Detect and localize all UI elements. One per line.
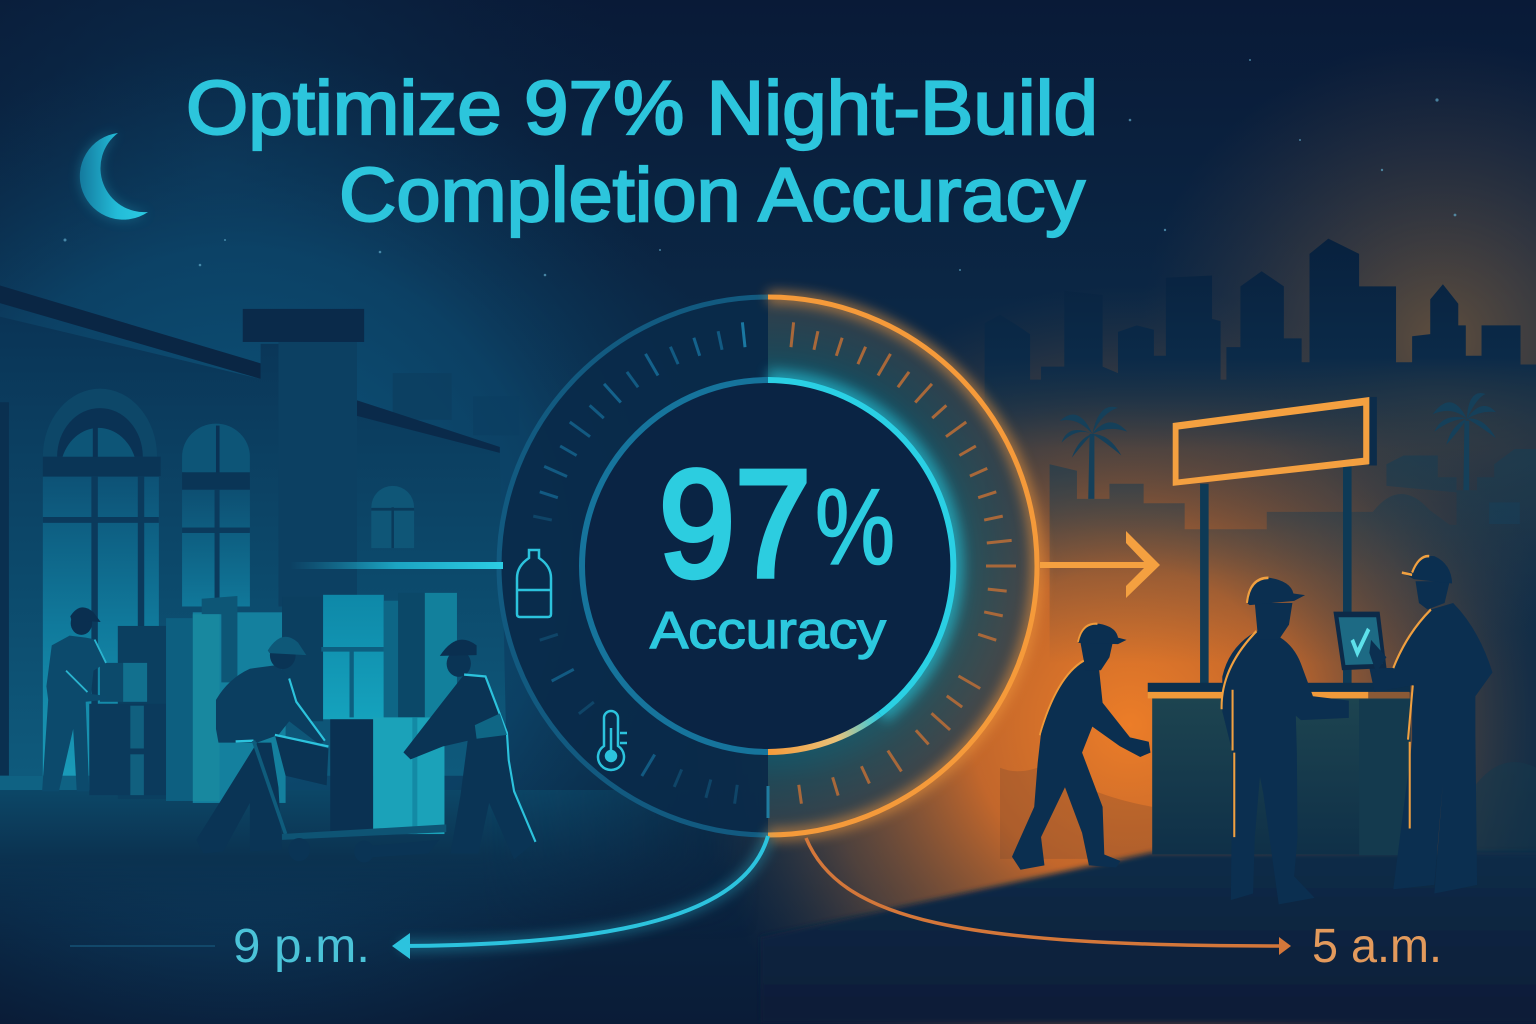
icon: bottle: [517, 550, 551, 617]
person far left: [42, 607, 107, 791]
label: 9 p.m.: 9 p.m.: [233, 920, 370, 973]
illustration: lower skyline and palms: [1000, 393, 1536, 859]
icon: tablet with check mark: [1333, 612, 1386, 672]
worker middle: [1222, 578, 1349, 904]
walking worker: [1012, 624, 1150, 870]
illustration: sign board: [1173, 397, 1377, 688]
title: Completion Accuracy: [339, 153, 1085, 238]
illustration: stacked crates: [89, 593, 457, 834]
icon: thermometer: [598, 711, 627, 770]
big arched window: [43, 389, 161, 776]
illustration: right workers: [1012, 556, 1492, 904]
person with box: [403, 640, 536, 859]
metric: 97%: %: [815, 466, 895, 587]
illustration: floor left: [0, 790, 662, 901]
arrow: line from left scene into gauge: [290, 562, 503, 569]
title: [186, 66, 1098, 238]
worker right: [1369, 556, 1492, 894]
second arched window: [182, 424, 250, 606]
illustration: counter: [1148, 683, 1410, 855]
person pushing cart: [196, 637, 328, 854]
gauge: inner circle: [582, 380, 954, 752]
icon: crescent moon: [80, 133, 148, 220]
arrow: gauge to right scene: [1040, 531, 1160, 598]
arrow: curve to 5 a.m.: [806, 838, 1291, 955]
illustration: right ground: [761, 852, 1536, 1024]
illustration: city skyline: [985, 239, 1536, 577]
title: Optimize 97% Night-Build: [186, 66, 1098, 151]
small window: [371, 486, 414, 548]
gauge: outer ring: [499, 297, 1037, 835]
hand cart: [253, 741, 446, 862]
illustration: left workers: [42, 607, 536, 862]
illustration: warehouse building: [0, 286, 519, 799]
arrow: curve to 9 p.m.: [70, 836, 768, 959]
gauge: dark disc: [497, 295, 1039, 837]
metric: 97%: 97: [659, 439, 811, 609]
label: 5 a.m.: 5 a.m.: [1312, 920, 1442, 973]
gauge: tick marks: [533, 322, 1016, 818]
label: Accuracy: Accuracy: [650, 602, 886, 660]
stars: [64, 59, 1456, 276]
